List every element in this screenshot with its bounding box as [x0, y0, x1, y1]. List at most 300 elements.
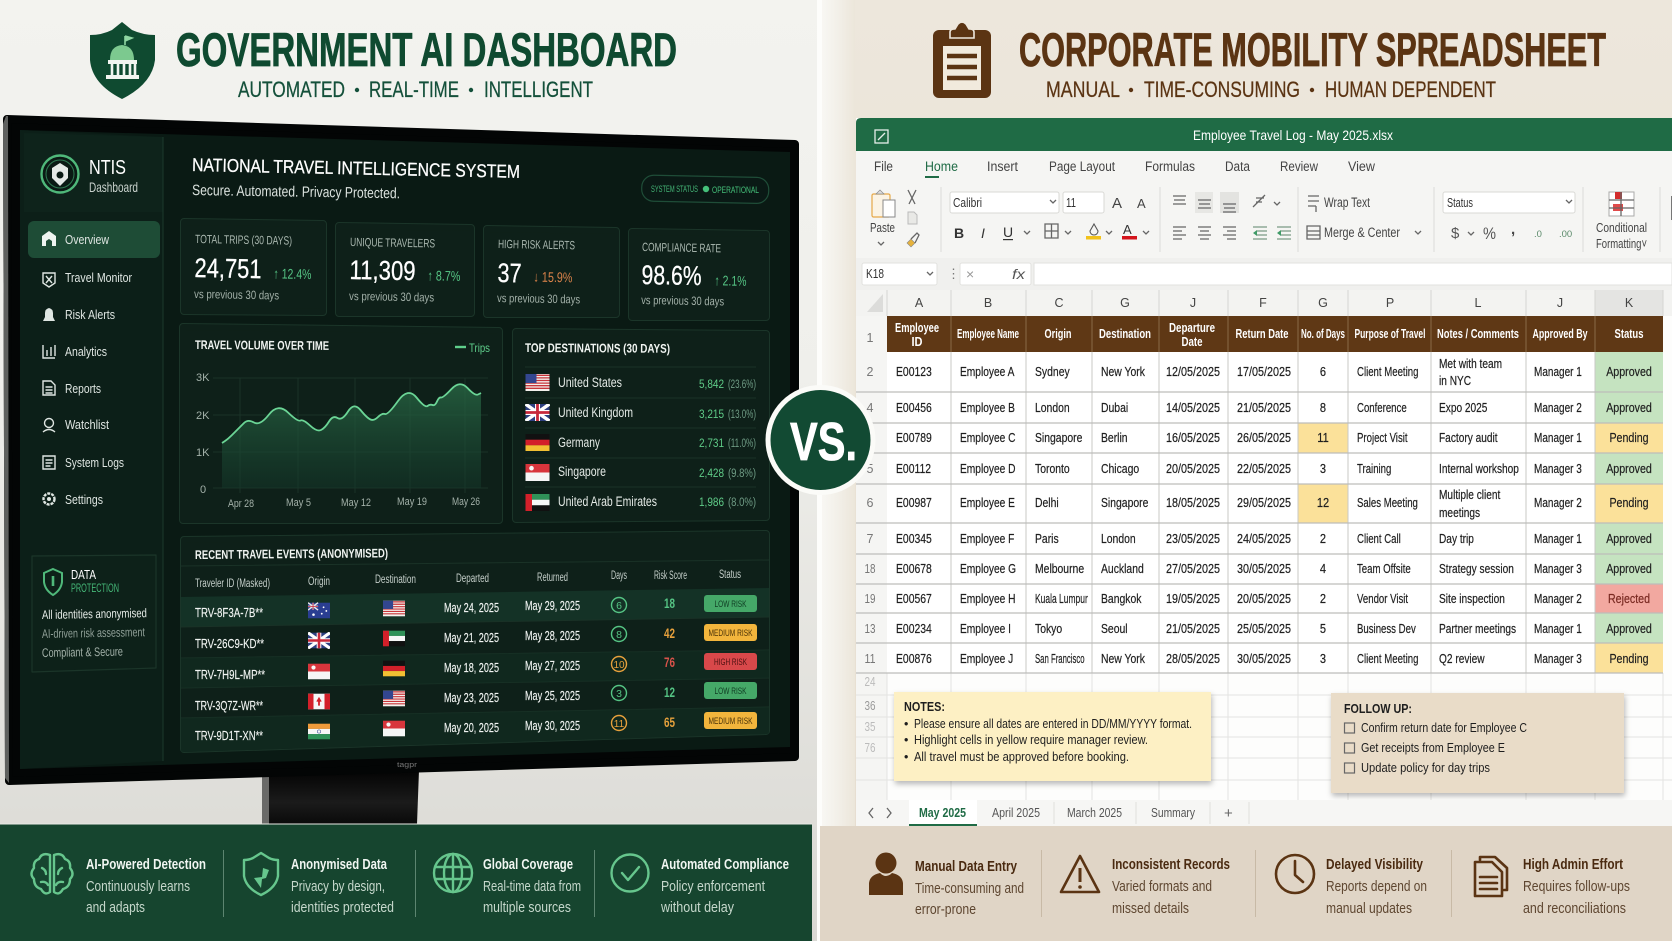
system status pill: OPERATIONAL — [712, 185, 759, 196]
alignment group — [1173, 192, 1421, 240]
column: employee id: E00678 — [896, 562, 932, 576]
logo: NTIS: Dashboard — [89, 179, 138, 195]
column: origin: Delhi — [1035, 496, 1059, 510]
column: employee name: Employee F — [960, 532, 1014, 546]
benefit: ai-powered detection: and adapts — [86, 900, 145, 916]
table header: Origin — [308, 576, 330, 588]
column headers: A — [915, 296, 924, 310]
row 2: MEDIUM RISK — [708, 628, 753, 639]
column: return date: 20/05/2025 — [1237, 591, 1291, 606]
column: approved by: Manager 1 — [1534, 622, 1582, 636]
background: centre white strip — [817, 0, 822, 941]
table header: Days — [611, 570, 627, 582]
column: return date: 21/05/2025 — [1237, 400, 1291, 415]
column: employee id: E00987 — [896, 496, 932, 510]
VS badge: VS. — [790, 412, 857, 472]
row: singapore — [526, 464, 756, 481]
conditional formatting: Formatting˅ — [1596, 236, 1647, 251]
column: notes: Internal workshop — [1439, 462, 1519, 476]
nav: risk alerts — [43, 307, 115, 322]
ribbon: Home — [925, 159, 958, 174]
column: number of days: 5 — [1320, 621, 1326, 636]
column: purpose of travel: Client Meeting — [1357, 653, 1418, 666]
column: destination: London — [1101, 532, 1136, 546]
column: employee name: Employee H — [960, 592, 1016, 606]
column: return date — [1237, 364, 1291, 666]
empty grid — [856, 673, 1672, 800]
column: status: Approved — [1606, 364, 1652, 379]
row numbers: 24 — [864, 675, 876, 689]
column: number of days: 3 — [1320, 461, 1326, 476]
sheet tabs — [856, 800, 1672, 826]
nav: watchlist — [43, 417, 109, 432]
wrap text — [1308, 196, 1319, 212]
column: departure date: 21/05/2025 — [1166, 621, 1220, 636]
nav: travel monitor: Travel Monitor — [65, 270, 133, 285]
row 5: May 20, 2025 — [444, 720, 499, 735]
column: status: Approved — [1606, 461, 1652, 476]
drawback: delayed visibility: Delayed Visibility — [1326, 857, 1423, 873]
kpi: high risk alerts: 37 — [497, 258, 522, 288]
sheet tabs: Summary — [1151, 805, 1195, 820]
column: approved by: Manager 2 — [1534, 401, 1582, 415]
column: notes: Q2 review — [1439, 652, 1485, 666]
data protection box: All identities anonymised — [42, 606, 147, 622]
table header row: ID — [912, 335, 922, 349]
kpi: unique travelers — [339, 226, 471, 313]
column: employee id — [896, 365, 932, 666]
kpi: unique travelers: 11,309 — [349, 255, 416, 286]
formula bar: fx — [1012, 266, 1026, 282]
row 1: May 24, 2025 — [444, 600, 499, 615]
column: purpose of travel: Business Dev — [1357, 623, 1416, 636]
data protection box: AI-driven risk assessment — [42, 625, 145, 641]
sidebar — [20, 130, 163, 769]
benefit: ai-powered detection — [32, 854, 206, 916]
drawback: manual data entry — [869, 852, 1024, 918]
table header row: Approved By — [1532, 327, 1588, 341]
column: approved by — [1534, 365, 1582, 666]
row 2: May 28, 2025 — [525, 628, 580, 643]
monitor stand — [262, 770, 419, 824]
drawback: high admin effort: Requires follow-ups — [1523, 879, 1630, 895]
row numbers: 7 — [867, 532, 874, 546]
nav: analytics: Analytics — [65, 344, 107, 359]
row 2: 42 — [664, 625, 675, 641]
row: germany: (11.0%) — [728, 438, 756, 450]
row 3 — [195, 653, 757, 682]
table header row: Origin — [1044, 327, 1072, 341]
sticky note: notes: • — [904, 717, 908, 731]
axis labels: May 26 — [452, 496, 480, 508]
dashboard heading — [192, 154, 520, 202]
column headers: F — [1259, 296, 1267, 310]
nav: risk alerts: Risk Alerts — [65, 307, 115, 322]
benefit: automated compliance: Policy enforcement — [661, 879, 765, 895]
table header row: Notes / Comments — [1437, 327, 1519, 341]
row: united kingdom: 3,215 — [699, 407, 724, 421]
column: notes: Site inspection — [1439, 592, 1505, 606]
drawback: manual data entry: Time-consuming and — [915, 881, 1024, 897]
column: purpose of travel: Vendor Visit — [1357, 593, 1409, 606]
kpi: high risk alerts: ↓ 15.9% — [533, 269, 573, 285]
row 4 — [195, 682, 757, 713]
drawback: delayed visibility — [1276, 855, 1427, 917]
font group: I — [981, 225, 985, 241]
benefit: automated compliance: Automated Compliance — [661, 857, 789, 873]
icon: clipboard — [933, 22, 991, 98]
subtitle: manual: TIME-CONSUMING — [1144, 77, 1300, 102]
sticky note: notes: Highlight cells in yellow require manager review. — [914, 733, 1148, 747]
kpi: high risk alerts — [487, 229, 616, 314]
number group: $ — [1451, 225, 1460, 242]
nav: travel monitor — [43, 270, 133, 287]
screen — [20, 130, 790, 769]
system status pill — [641, 175, 769, 204]
data protection box: PROTECTION — [71, 581, 119, 595]
drawback: delayed visibility: Reports depend on — [1326, 879, 1427, 895]
axis labels: May 5 — [286, 497, 311, 509]
sticky note: notes: Please ensure all dates are entered in DD/MM/YYYY format. — [914, 717, 1192, 731]
column: status: Approved — [1606, 621, 1652, 636]
row 3: 76 — [664, 654, 675, 670]
row 1: 18 — [664, 595, 675, 611]
alignment group: Merge & Center — [1324, 225, 1400, 240]
column headers: J — [1190, 296, 1196, 310]
row numbers: 2 — [867, 365, 874, 379]
nav: analytics — [43, 344, 107, 359]
row 4: May 23, 2025 — [444, 690, 499, 705]
kpi: total trips: TOTAL TRIPS (30 DAYS) — [195, 232, 292, 248]
column: departure date: 14/05/2025 — [1166, 400, 1220, 415]
column: origin: Kuala Lumpur — [1035, 592, 1088, 606]
table header row: Employee — [895, 321, 939, 335]
background: left panel — [0, 0, 817, 941]
chart panel: travel volume over time: TRAVEL VOLUME OVER TIME — [195, 338, 329, 353]
column: origin — [1035, 365, 1088, 666]
number group: , — [1511, 221, 1515, 238]
column: notes — [1439, 357, 1519, 666]
column: departure date: 28/05/2025 — [1166, 651, 1220, 666]
table header — [195, 569, 741, 590]
row 4: 12 — [664, 684, 675, 700]
table header: Risk Score — [654, 570, 687, 582]
row numbers: 11 — [864, 652, 876, 666]
column: approved by: Manager 2 — [1534, 496, 1582, 510]
panel: recent travel events: RECENT TRAVEL EVENTS (ANONYMISED) — [195, 546, 388, 562]
sticky note: notes: NOTES: — [904, 700, 945, 714]
nav: system logs: System Logs — [65, 455, 124, 470]
column headers: G — [1318, 296, 1328, 310]
row numbers: 35 — [864, 720, 876, 734]
benefit: anonymised data: identities protected — [291, 900, 394, 916]
icon: government shield — [90, 22, 155, 99]
column: employee id: E00345 — [896, 532, 932, 546]
column: origin: Tokyo — [1035, 622, 1063, 636]
ribbon: View — [1348, 159, 1375, 174]
spreadsheet window — [856, 118, 1672, 826]
row numbers: 18 — [864, 562, 876, 576]
column: approved by: Manager 3 — [1534, 652, 1582, 666]
sticky note: follow up — [1331, 693, 1624, 793]
row: united arab emirates: United Arab Emirates — [558, 494, 657, 509]
benefit: global coverage — [434, 854, 581, 916]
column: purpose of travel: Client Meeting — [1357, 366, 1418, 379]
nav: settings — [44, 492, 103, 507]
formula bar: K18 — [866, 266, 884, 281]
row: united kingdom — [526, 404, 756, 421]
column: destination: Chicago — [1101, 462, 1140, 476]
column: return date: 24/05/2025 — [1237, 531, 1291, 546]
column: departure date: 23/05/2025 — [1166, 531, 1220, 546]
row 4: TRV-3Q7Z-WR** — [195, 698, 263, 713]
column: purpose of travel: Project Visit — [1357, 432, 1408, 445]
status fills — [1298, 352, 1663, 673]
column: origin: Melbourne — [1035, 562, 1085, 576]
sticky note: notes: All travel must be approved before booking. — [914, 750, 1129, 764]
row numbers: 4 — [867, 401, 874, 415]
row 1: 6 — [616, 600, 622, 612]
column headers: L — [1475, 296, 1482, 310]
panel: top destinations — [516, 332, 766, 519]
table header row: Status — [1614, 327, 1644, 341]
row 4: May 25, 2025 — [525, 688, 580, 703]
axis labels: May 12 — [341, 497, 371, 509]
column: status: Pending — [1609, 651, 1649, 666]
kpi: total trips — [184, 222, 323, 312]
column: approved by: Manager 3 — [1534, 462, 1582, 476]
subtitle: manual: HUMAN DEPENDENT — [1325, 77, 1496, 102]
font group — [950, 192, 1149, 241]
column: purpose of travel: Client Call — [1357, 533, 1401, 546]
column: origin: San Francisco — [1035, 652, 1085, 666]
drawback: high admin effort: High Admin Effort — [1523, 857, 1623, 873]
number group: .00 — [1559, 229, 1572, 240]
font group: B — [954, 225, 964, 241]
column: notes: meetings — [1439, 506, 1480, 520]
column: status: Approved — [1606, 531, 1652, 546]
nav: reports — [43, 381, 101, 396]
sheet tabs: March 2025 — [1067, 805, 1122, 820]
formula bar: ⋮ — [947, 266, 960, 281]
kpi: compliance rate — [632, 232, 766, 317]
conditional formatting: Conditional — [1596, 220, 1647, 235]
column: status: Pending — [1609, 495, 1649, 510]
column: notes: Partner meetings — [1439, 622, 1516, 636]
axis labels: 1K — [196, 447, 210, 459]
font group: A — [1112, 195, 1122, 212]
column headers: P — [1386, 296, 1394, 310]
column: notes: Factory audit — [1439, 431, 1498, 445]
ribbon — [856, 151, 1672, 258]
column: destination: Dubai — [1101, 401, 1128, 415]
column: departure date: 19/05/2025 — [1166, 591, 1220, 606]
drawback: delayed visibility: manual updates — [1326, 901, 1412, 917]
benefit: global coverage: Real-time data from — [483, 879, 581, 895]
row 5: 65 — [664, 714, 675, 730]
column: status: Approved — [1606, 400, 1652, 415]
column: number of days: 2 — [1320, 531, 1326, 546]
kpi: compliance rate: vs previous 30 days — [641, 293, 724, 308]
subtitle: automated: AUTOMATED — [238, 77, 345, 102]
chart panel: travel volume over time: Trips — [469, 341, 490, 355]
column headers: G — [1120, 296, 1130, 310]
column: number of days: 2 — [1320, 591, 1326, 606]
column: notes: in NYC — [1439, 374, 1471, 388]
travel log table — [856, 316, 1663, 673]
row numbers: 5 — [867, 462, 874, 476]
column: employee name: Employee C — [960, 431, 1016, 445]
table header: Departed — [456, 573, 489, 585]
column: purpose of travel: Team Offsite — [1357, 563, 1411, 576]
nav: overview active: Overview — [65, 232, 109, 247]
row 5: MEDIUM RISK — [708, 716, 753, 727]
column: notes: Met with team — [1439, 357, 1502, 371]
logo: NTIS: NTIS — [89, 157, 126, 179]
benefit: global coverage: multiple sources — [483, 900, 571, 916]
row 1: TRV-8F3A-7B** — [195, 605, 263, 620]
merge center — [1307, 226, 1320, 239]
column: destination: Bangkok — [1101, 592, 1142, 606]
row: united states: (23.6%) — [728, 379, 756, 391]
column headers: J — [1557, 296, 1563, 310]
clipboard group — [870, 190, 919, 247]
sticky note: notes: • — [904, 750, 908, 764]
sticky note: notes: • — [904, 733, 908, 747]
font group: U — [1003, 224, 1013, 240]
row: united kingdom: (13.0%) — [728, 409, 756, 421]
table header row: Date — [1182, 335, 1203, 349]
number group: Status — [1447, 195, 1473, 210]
sticky note: follow up: Confirm return date for Employee C — [1361, 721, 1527, 735]
drawback: inconsistent records — [1061, 856, 1230, 917]
sheet tabs: May 2025 — [919, 805, 966, 820]
axis labels: 3K — [196, 372, 210, 384]
sheet tabs: + — [1224, 805, 1233, 822]
row numbers — [856, 316, 887, 800]
column: departure date: 27/05/2025 — [1166, 561, 1220, 576]
table header row: Destination — [1099, 327, 1151, 341]
line series — [222, 384, 481, 443]
axis labels: May 19 — [397, 496, 427, 508]
column: origin: Sydney — [1035, 365, 1070, 379]
benefit: anonymised data: Anonymised Data — [291, 857, 388, 873]
dashboard heading: NATIONAL TRAVEL INTELLIGENCE SYSTEM — [192, 154, 520, 182]
column: return date: 30/05/2025 — [1237, 561, 1291, 576]
column: destination — [1101, 365, 1149, 666]
column: employee name: Employee J — [960, 652, 1013, 666]
axis labels — [196, 372, 480, 510]
column: return date: 30/05/2025 — [1237, 651, 1291, 666]
column: origin: Toronto — [1035, 462, 1070, 476]
table header row: Purpose of Travel — [1354, 327, 1426, 341]
row 3: May 27, 2025 — [525, 658, 580, 673]
column: status: Pending — [1609, 430, 1649, 445]
subtitle: manual: MANUAL — [1046, 77, 1120, 102]
subtitle: automated: INTELLIGENT — [484, 77, 593, 102]
column: purpose of travel — [1357, 366, 1418, 666]
column: employee name: Employee A — [960, 365, 1015, 379]
row numbers: 76 — [864, 741, 876, 755]
axis labels: Apr 28 — [228, 498, 254, 510]
column: approved by: Manager 1 — [1534, 431, 1582, 445]
column: approved by: Manager 1 — [1534, 532, 1582, 546]
column: approved by: Manager 3 — [1534, 562, 1582, 576]
row: germany — [526, 434, 756, 451]
column: departure date: 18/05/2025 — [1166, 495, 1220, 510]
column: number of days: 12 — [1317, 495, 1329, 510]
dashboard heading: Secure. Automated. Privacy Protected. — [192, 182, 400, 202]
column: status: Approved — [1606, 561, 1652, 576]
column: destination: Auckland — [1101, 562, 1144, 576]
column: return date: 22/05/2025 — [1237, 461, 1291, 476]
nav: reports: Reports — [65, 381, 101, 396]
column: return date: 29/05/2025 — [1237, 495, 1291, 510]
column: origin: Singapore — [1035, 431, 1083, 445]
column: approved by: Manager 1 — [1534, 365, 1582, 379]
row 3: HIGH RISK — [714, 657, 747, 668]
row numbers: 1 — [867, 331, 874, 345]
benefit: automated compliance: without delay — [660, 900, 735, 916]
row 4: LOW RISK — [714, 686, 747, 697]
benefit: global coverage: Global Coverage — [483, 857, 573, 873]
table header: Returned — [537, 572, 568, 584]
row 2 — [195, 624, 757, 651]
row numbers: 36 — [864, 699, 876, 713]
benefit: ai-powered detection: Continuously learns — [86, 879, 190, 895]
sticky note: follow up: Update policy for day trips — [1361, 761, 1490, 775]
column: departure date: 20/05/2025 — [1166, 461, 1220, 476]
row: singapore: (9.8%) — [728, 468, 756, 480]
column: notes: Multiple client — [1439, 488, 1501, 502]
column: approved by: Manager 2 — [1534, 592, 1582, 606]
column: notes: Expo 2025 — [1439, 401, 1487, 415]
table header: Status — [719, 569, 741, 581]
drawbacks band: right — [820, 826, 1672, 941]
row 1: May 29, 2025 — [525, 598, 580, 613]
benefit: anonymised data — [244, 853, 394, 916]
table header row: Employee Name — [957, 327, 1019, 341]
conditional formatting — [1596, 192, 1672, 251]
kpi: total trips: ↑ 12.4% — [273, 265, 312, 282]
row numbers: 13 — [864, 622, 876, 636]
sheet tabs: April 2025 — [992, 805, 1040, 820]
column: employee id: E00567 — [896, 592, 932, 606]
row: singapore: Singapore — [558, 464, 606, 479]
background: right panel — [855, 0, 1672, 941]
nav: overview active — [28, 221, 160, 258]
nav: system logs — [43, 455, 124, 470]
drawback: manual data entry: Manual Data Entry — [915, 859, 1017, 875]
row 1 — [195, 595, 757, 620]
column: destination: New York — [1101, 365, 1145, 379]
drawback: inconsistent records: missed details — [1112, 901, 1189, 917]
kpi: total trips: vs previous 30 days — [194, 287, 279, 302]
title bar: Employee Travel Log - May 2025.xlsx — [1193, 127, 1393, 143]
column: departure date: 16/05/2025 — [1166, 430, 1220, 445]
column: notes: Day trip — [1439, 532, 1474, 546]
kpi: total trips: 24,751 — [194, 253, 262, 284]
row numbers: 6 — [867, 496, 874, 510]
table header row: No. of Days — [1301, 327, 1345, 341]
ribbon: Data — [1225, 159, 1250, 174]
benefit: anonymised data: Privacy by design, — [291, 879, 385, 895]
benefits band: left — [0, 824, 812, 941]
column: employee name: Employee G — [960, 562, 1016, 576]
row: united arab emirates: 1,986 — [699, 495, 724, 509]
ribbon: Page Layout — [1049, 159, 1115, 174]
column headers: K — [1625, 296, 1634, 310]
